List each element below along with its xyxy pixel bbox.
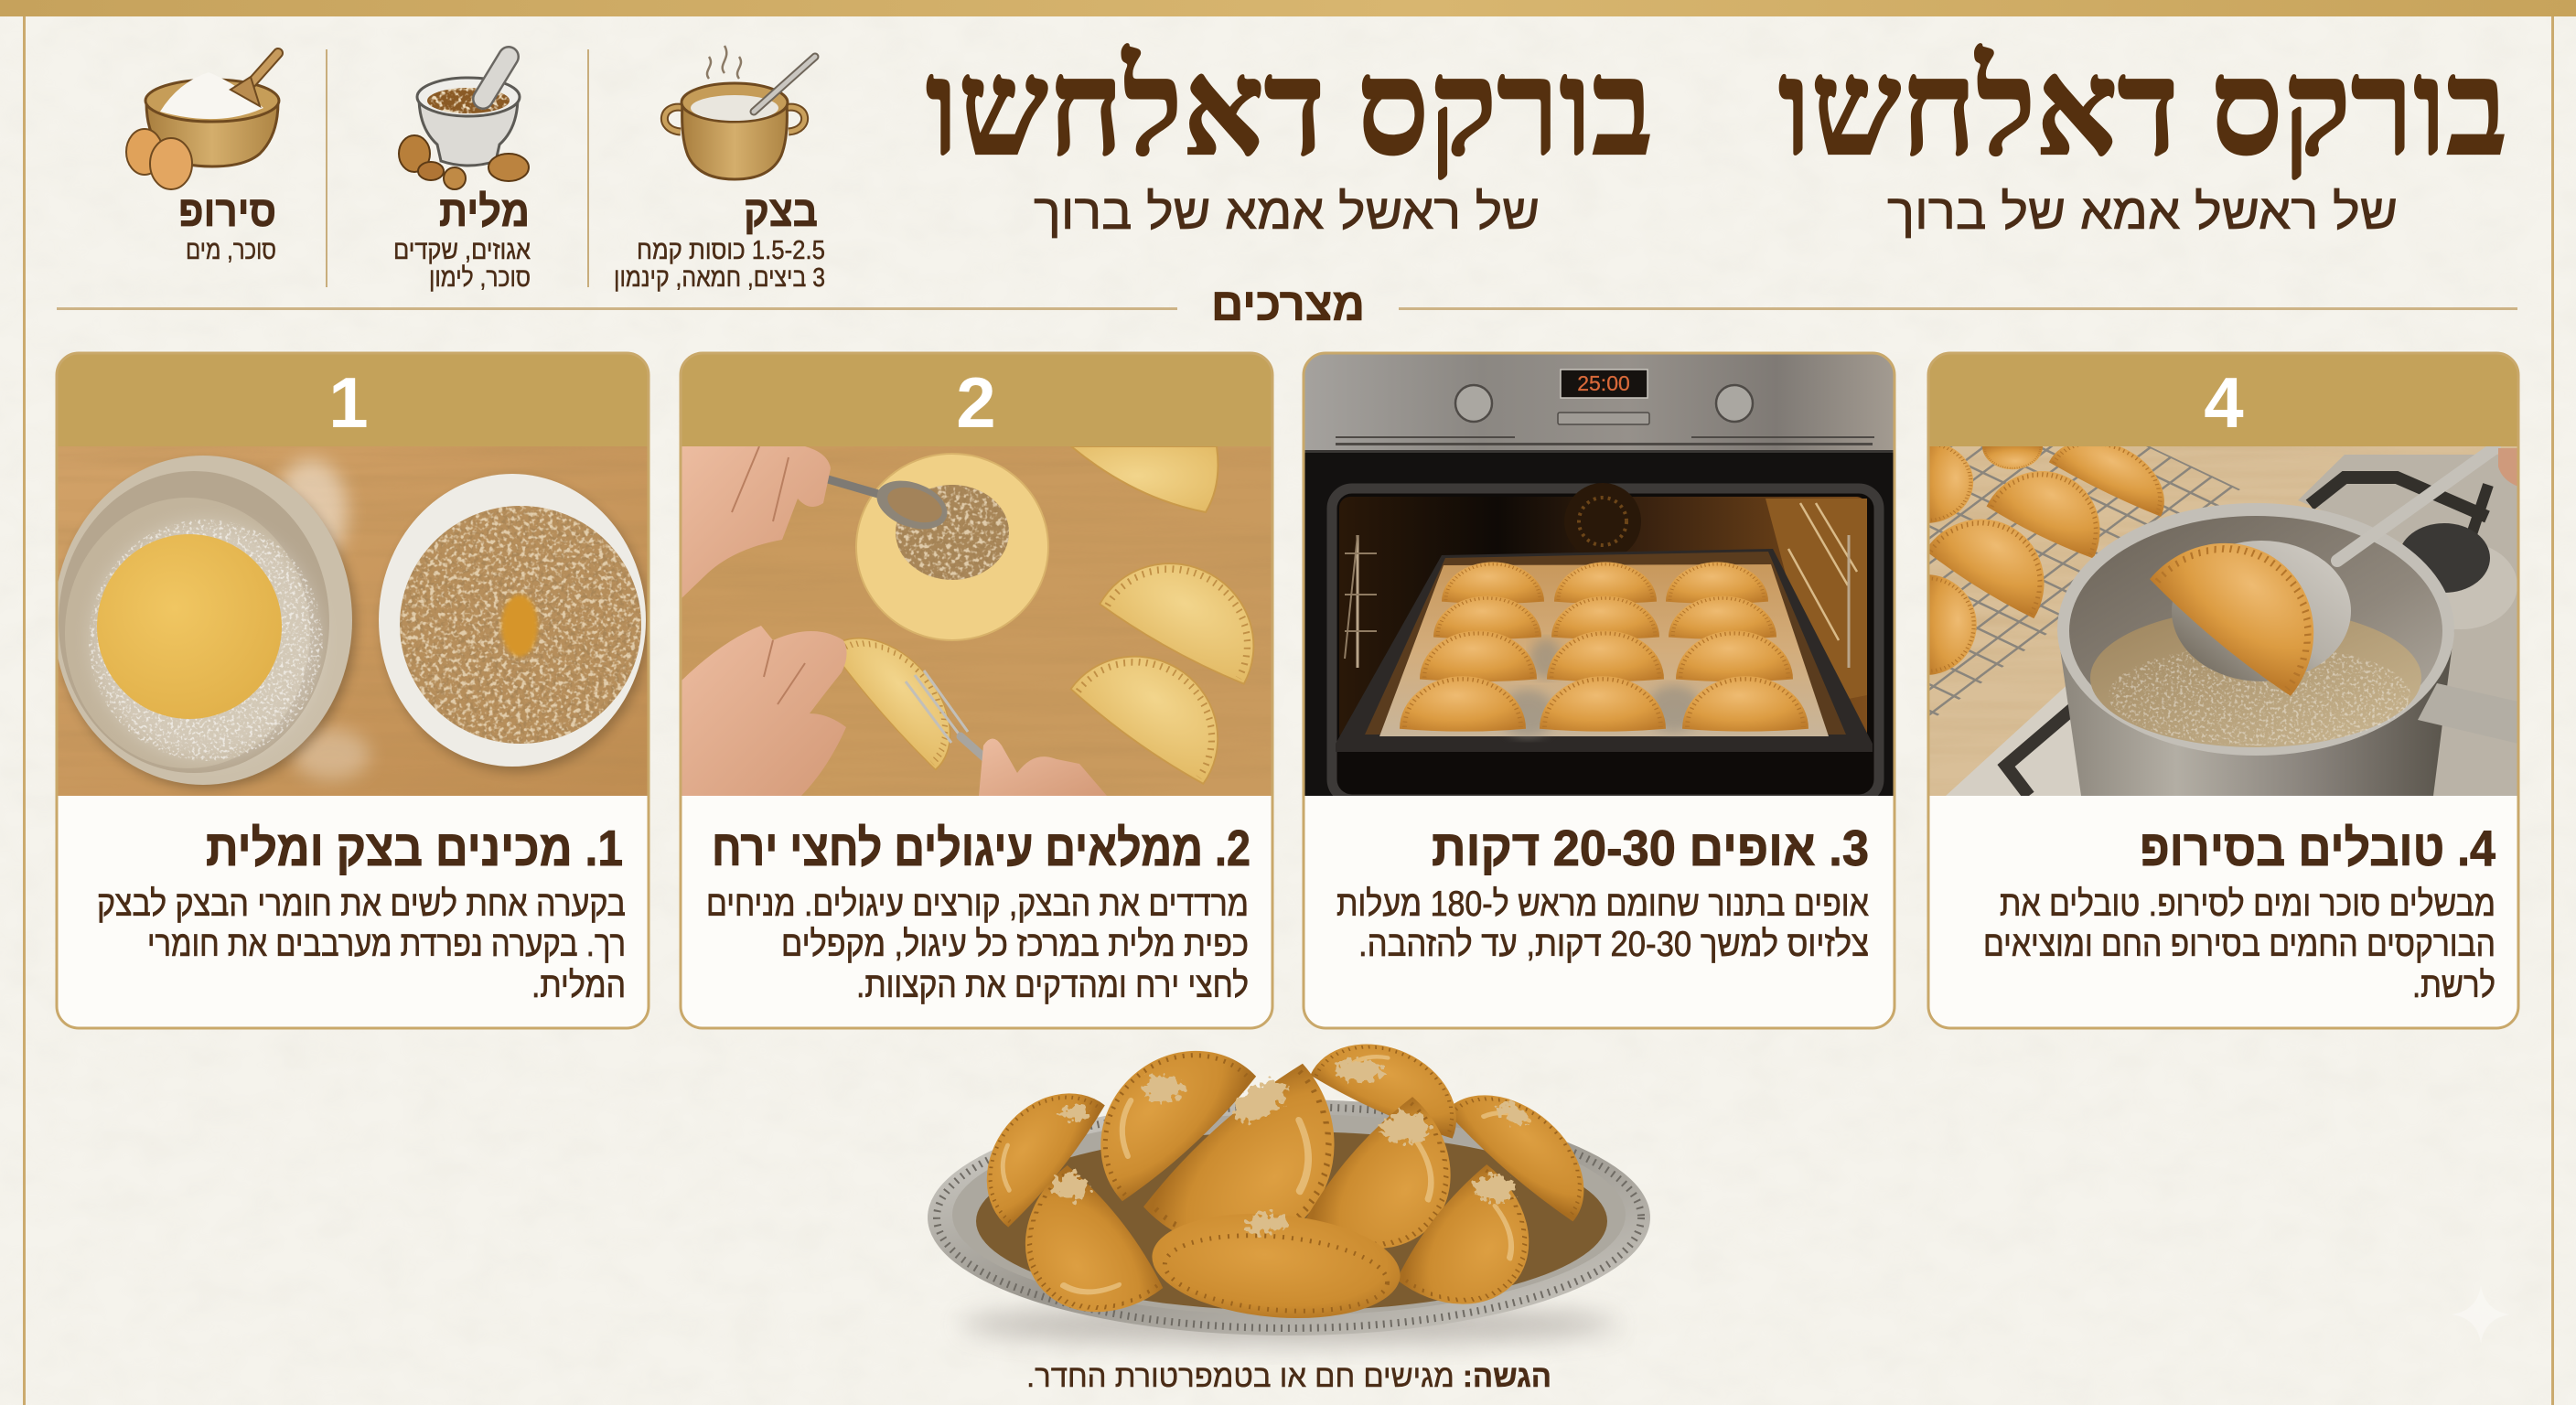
- top gold band: [0, 0, 2576, 16]
- icon: pot of dough: [664, 46, 815, 179]
- icon: mortar with nuts: [399, 57, 529, 189]
- photo: oven with tray: [1304, 353, 1894, 799]
- text: step 3 body: צלזיוס למשך 20-30 דקות, עד להזהבה.: [1358, 925, 1869, 964]
- right border line: [2551, 16, 2554, 1405]
- heading: ingredients: מצרכים: [1211, 279, 1365, 330]
- text: step 1 body: [97, 885, 626, 1005]
- text: step 1 body: המלית.: [531, 966, 626, 1005]
- text: step 3 heading: 3. אופים 20-30 דקות: [1432, 820, 1869, 876]
- panel: step 4: [1923, 353, 2518, 1028]
- left border line: [23, 16, 26, 1405]
- text: step 2 body: כפית מלית במרכז כל עיגול, מקפלים: [781, 925, 1249, 964]
- text: step 4 body: [1983, 885, 2496, 1005]
- title: first copy: בורקס דאלחשו: [1778, 35, 2507, 183]
- text: step 4 body: לרשת.: [2412, 966, 2496, 1005]
- heading: syrup: סירופ: [178, 187, 276, 235]
- panel: ingredients: [126, 46, 825, 293]
- header: number 2: [681, 353, 1272, 446]
- text: dough ingredients: 3 ביצים, חמאה, קינמון: [614, 263, 825, 293]
- text: dough ingredients: 1.5-2.5 כוסות קמח: [637, 236, 825, 265]
- text: step 2 body: [706, 885, 1249, 1005]
- text: step 2 body: מרדדים את הבצק, קורצים עיגולים. מניחים: [706, 885, 1249, 924]
- text: step 3 body: אופים בתנור שחומם מראש ל-180 מעלות: [1336, 885, 1869, 924]
- header: number 4: 4: [2204, 362, 2244, 443]
- header: number 4: [1928, 353, 2518, 446]
- photo: filling and folding circles: [681, 446, 1283, 796]
- text: step 1 heading: 1. מכינים בצק ומלית: [206, 820, 623, 876]
- panel: step 1: [54, 353, 649, 1028]
- text: step 1 body: רך. בקערה נפרדת מערבבים את חומרי: [147, 925, 626, 964]
- text: syrup ingredients: סוכר, מים: [186, 236, 276, 265]
- text: step 2 body: לחצי ירח ומהדקים את הקצוות.: [856, 966, 1249, 1005]
- text: step 4 body: מבשלים סוכר ומים לסירופ. טובלים את: [2000, 885, 2496, 924]
- icon: bowl with flour and eggs: [126, 53, 279, 189]
- subtitle: first copy: של ראשל אמא של ברוך: [1887, 185, 2398, 240]
- text: filling ingredients: אגוזים, שקדים: [393, 236, 531, 265]
- watermark sparkle: [2452, 1285, 2510, 1344]
- heading: filling: מלית: [439, 187, 530, 235]
- subtitle: second copy: של ראשל אמא של ברוך: [1034, 185, 1540, 240]
- text: serving note: הגשה: מגישים חם או בטמפרטורת החדר.: [1026, 1359, 1551, 1394]
- panel: step 2: [681, 353, 1283, 1028]
- photo: serving plate of pastries: [928, 1014, 1650, 1347]
- title: second copy: בורקס דאלחשו: [926, 35, 1653, 183]
- photo: oven with tray: 25:00: [1577, 371, 1630, 395]
- text: step 2 heading: 2. ממלאים עיגולים לחצי ירח: [712, 820, 1250, 876]
- text: filling ingredients: סוכר, לימון: [429, 263, 531, 293]
- text: step 4 heading: 4. טובלים בסירופ: [2140, 820, 2496, 876]
- photo: dipping in syrup: [1923, 422, 2518, 796]
- text: filling ingredients: [393, 236, 531, 293]
- text: step 1 body: בקערה אחת לשים את חומרי הבצק לבצק: [97, 885, 626, 924]
- heading: dough: בצק: [744, 187, 818, 235]
- text: step 4 body: הבורקסים החמים בסירופ החם ומוציאים: [1983, 925, 2496, 964]
- text: dough ingredients: [614, 236, 825, 293]
- photo: dough and filling bowls: [54, 446, 649, 796]
- header: number 1: [57, 353, 649, 446]
- panel: step 3: [1304, 353, 1894, 1028]
- header: number 1: 1: [328, 362, 369, 443]
- header: number 2: 2: [956, 362, 996, 443]
- text: step 3 body: [1336, 885, 1869, 964]
